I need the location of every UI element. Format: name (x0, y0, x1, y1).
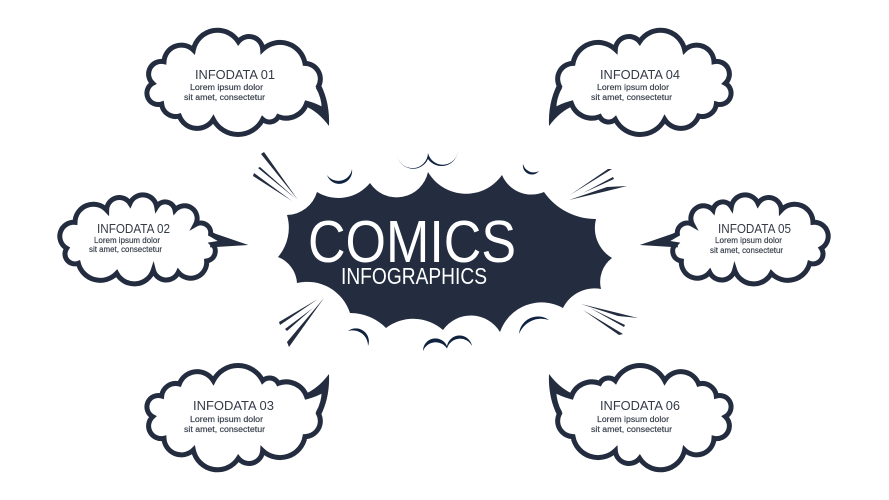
speech bubble 01 (147, 30, 329, 134)
label 01: INFODATA 01 (195, 67, 275, 82)
crescent accents above burst (327, 150, 539, 184)
speed lines bottom left (279, 298, 324, 347)
label 05: INFODATA 05 (718, 221, 791, 236)
body text 05: Lorem ipsum dolor (715, 236, 782, 245)
label 04: INFODATA 04 (600, 67, 680, 82)
crescent accents below burst (348, 316, 549, 351)
label 03: INFODATA 03 (193, 398, 274, 413)
speed lines top left (253, 152, 298, 201)
body text 02: Lorem ipsum dolor (94, 236, 160, 245)
speech bubble 05 (640, 195, 828, 284)
subtitle: INFOGRAPHICS: INFOGRAPHICS (341, 263, 487, 289)
speed lines top right (569, 169, 627, 200)
bubble outline 05 (640, 195, 828, 284)
body text 03: Lorem ipsum dolor (190, 415, 263, 424)
title: COMICS: COMICS (308, 209, 516, 275)
speech bubble 03 (147, 366, 329, 470)
body text 01: sit amet, consectetur (184, 93, 265, 102)
bubble outline 02 (60, 195, 248, 284)
label 02: INFODATA 02 (97, 221, 170, 236)
speed lines bottom right (581, 304, 638, 335)
body text 02: sit amet, consectetur (89, 245, 162, 254)
bubble outline 01 (147, 30, 329, 134)
body text 03: sit amet, consectetur (184, 425, 265, 434)
bubble outline 03 (147, 366, 329, 470)
bubble outline 04 (549, 30, 731, 134)
body text 01: Lorem ipsum dolor (190, 83, 263, 92)
central comic burst (278, 172, 612, 332)
body text 06: sit amet, consectetur (591, 425, 672, 434)
body text 04: sit amet, consectetur (591, 93, 672, 102)
speech bubble 06 (549, 366, 731, 470)
body text 06: Lorem ipsum dolor (597, 415, 669, 424)
bubble outline 06 (549, 366, 731, 470)
speech bubble 02 (60, 195, 248, 284)
speech bubble 04 (549, 30, 731, 134)
label 06: INFODATA 06 (600, 398, 680, 413)
body text 05: sit amet, consectetur (710, 246, 783, 255)
body text 04: Lorem ipsum dolor (597, 83, 669, 92)
